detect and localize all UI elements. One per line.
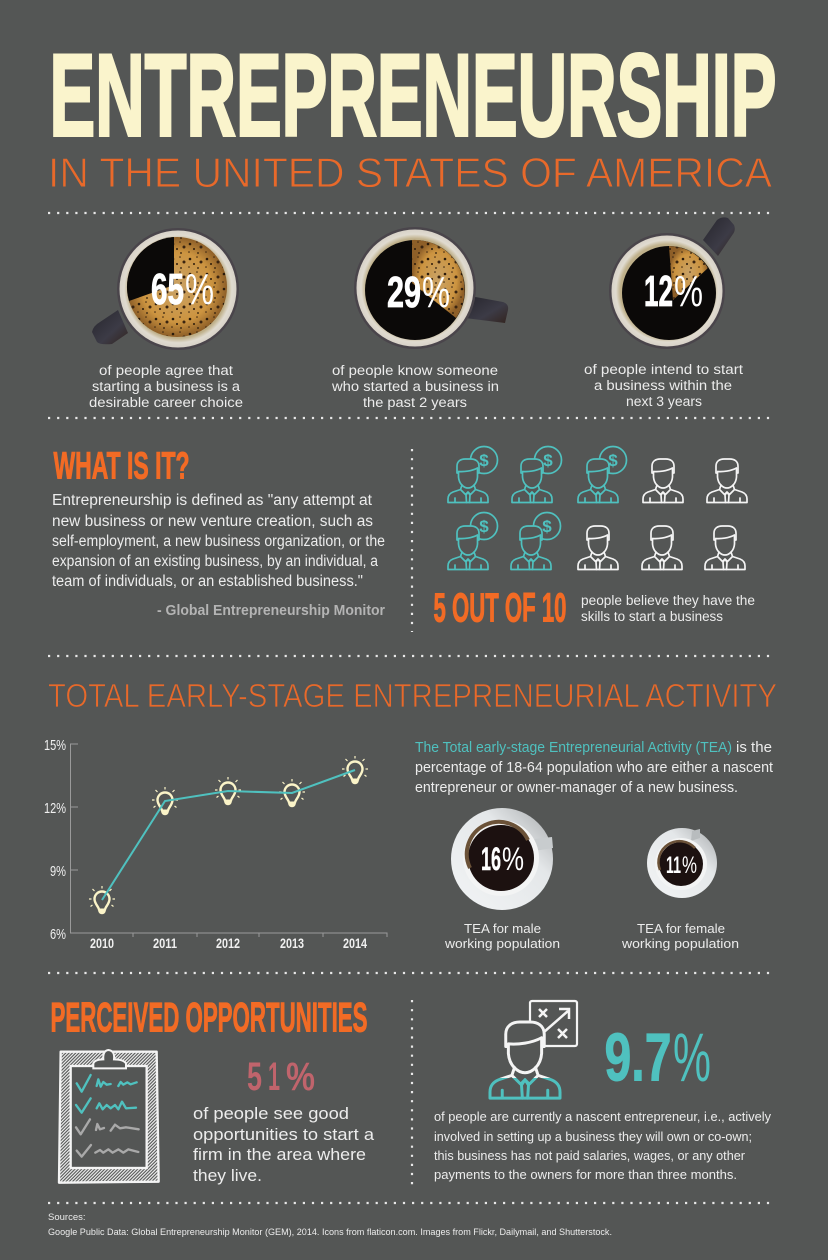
caption: 29% [331, 363, 499, 410]
icon: person with dollar 1 [448, 446, 498, 502]
icon: person with dollar 2 [512, 446, 562, 502]
pictogram: 5 out of 10 people [448, 446, 747, 570]
TEA description: The Total early-stage Entrepreneurial Activity (TEA) [415, 740, 732, 756]
stat: 9.7%: 9.7 [604, 1020, 672, 1096]
icon: person with dollar 7 [511, 512, 560, 570]
text: nascent entrepreneur: involved in setting up a business they will own or co-own; [434, 1129, 752, 1144]
line chart: TEA 2010-2014: 2011 [153, 935, 177, 951]
caption: 65% [89, 363, 243, 410]
caption: 29%: who started a business in [331, 379, 499, 394]
stat: 51%: % [286, 1055, 315, 1099]
caption: 29%: the past 2 years [363, 395, 467, 410]
white coffee cup: 16% male: 16 [481, 841, 501, 877]
definition text [52, 492, 385, 590]
caption: female: working population [621, 936, 739, 951]
coffee cup stat: 29% [354, 227, 508, 349]
stat caption [581, 593, 755, 624]
text: perceived opportunities: they live. [193, 1166, 262, 1185]
icon: person with dollar 7: $ [542, 517, 552, 536]
stat: 51% [247, 1055, 315, 1099]
text: nascent entrepreneur: payments to the owners for more than three months. [434, 1167, 737, 1182]
white coffee cup: 11% female: 11 [666, 852, 681, 879]
icon: person 10 [705, 526, 745, 570]
icon: person with dollar 3: $ [608, 451, 618, 470]
data line [102, 770, 355, 900]
stat: 51%: 1 [268, 1055, 280, 1099]
coffee cup stat: 12%: % [674, 267, 703, 316]
caption: male: TEA for male [464, 921, 541, 936]
caption: male [444, 921, 560, 951]
sources: Sources: [48, 1212, 86, 1223]
stat: 9.7%: % [673, 1019, 711, 1096]
stat caption: skills to start a business [581, 609, 723, 624]
text: perceived opportunities: of people see good [193, 1104, 349, 1123]
line chart: TEA 2010-2014 [44, 737, 387, 951]
icon: lightbulb markers [89, 756, 368, 914]
icon: person 4 [643, 459, 683, 502]
caption: 12%: a business within the [594, 378, 732, 393]
text: nascent entrepreneur [434, 1109, 771, 1182]
TEA description [415, 740, 773, 796]
line chart: TEA 2010-2014: 2012 [216, 935, 240, 951]
TEA description: percentage of 18-64 population who are either a nascent [415, 760, 773, 776]
icon: person with dollar 2: $ [543, 451, 553, 470]
line chart: TEA 2010-2014: 6% [50, 926, 66, 943]
white coffee cup: 11% female [647, 828, 717, 898]
icon: person 5 [707, 459, 747, 502]
caption: female: TEA for female [637, 921, 725, 936]
coffee cup stat: 65%: 65 [151, 265, 184, 314]
white coffee cup: 11% female: % [682, 852, 697, 879]
icon: person with dollar 6: $ [479, 517, 489, 536]
sources: Google Public Data: Global Entrepreneurship Monitor (GEM), 2014. Icons from flaticon.com. Images from Flickr, Dailymail, and Shutterstock. [48, 1227, 612, 1238]
icon: person with dollar 3 [578, 446, 626, 502]
definition text: Entrepreneurship is defined as "any attempt at [52, 492, 373, 509]
coffee cup stat: 12%: 12 [644, 267, 673, 316]
icon: person with dollar 1: $ [479, 451, 489, 470]
caption: 65%: desirable career choice [89, 395, 243, 410]
caption: 12%: of people intend to start [584, 362, 743, 377]
icon: person 8 [578, 526, 618, 570]
sources [48, 1212, 612, 1238]
heading: what is it: WHAT IS IT? [54, 446, 190, 488]
coffee cup stat: 65%: % [185, 265, 214, 314]
definition text: new business or new venture creation, such as [52, 513, 373, 530]
line chart: TEA 2010-2014: 2013 [280, 935, 304, 951]
line chart: TEA 2010-2014: 2014 [343, 935, 367, 951]
icon: person with dollar 6 [448, 512, 498, 570]
caption: female [621, 921, 739, 951]
definition text: self-employment, a new business organization, or the [52, 533, 385, 550]
coffee cup stat: 12% [609, 217, 735, 349]
line chart: TEA 2010-2014: 9% [50, 863, 66, 880]
coffee cup stat: 29%: 29 [387, 268, 421, 317]
text: perceived opportunities [193, 1104, 375, 1185]
coffee cup stat: 65% [92, 228, 239, 350]
TEA description: is the [736, 740, 772, 756]
text: perceived opportunities: opportunities to start a [193, 1125, 375, 1144]
caption: 12% [584, 362, 743, 409]
subtitle: IN THE UNITED STATES OF AMERICA [48, 149, 772, 196]
stat: 5 out of 10: 5 OUT OF 10 [434, 584, 566, 630]
line chart: TEA 2010-2014: 2010 [90, 935, 114, 951]
line chart: TEA 2010-2014: 15% [44, 737, 66, 754]
white coffee cup: 16% male [451, 808, 553, 910]
icon: person with strategy board [490, 1001, 577, 1098]
caption: 65%: of people agree that [99, 363, 233, 378]
heading: perceived opportunities: PERCEIVED OPPORTUNITIES [50, 994, 368, 1040]
caption: 29%: of people know someone [332, 363, 498, 378]
text: nascent entrepreneur: of people are currently a nascent entrepreneur, i.e., actively [434, 1109, 771, 1124]
coffee cup stat: 29%: % [422, 268, 450, 317]
icon: person 9 [642, 526, 682, 570]
attribution: - Global Entrepreneurship Monitor [157, 603, 385, 619]
definition text: expansion of an existing business, by an individual, a [52, 553, 378, 570]
stat: 51%: 5 [247, 1055, 262, 1099]
stat caption: people believe they have the [581, 593, 755, 608]
caption: 65%: starting a business is a [92, 379, 241, 394]
text: nascent entrepreneur: this business has not paid salaries, wages, or any other [434, 1148, 746, 1163]
caption: male: working population [444, 936, 560, 951]
line chart: TEA 2010-2014: 12% [44, 800, 66, 817]
icon: clipboard checklist [59, 1050, 159, 1183]
caption: 12%: next 3 years [626, 394, 702, 409]
text: perceived opportunities: firm in the area where [193, 1145, 366, 1164]
white coffee cup: 16% male: % [502, 841, 524, 877]
TEA description: entrepreneur or owner-manager of a new business. [415, 780, 738, 796]
definition text: team of individuals, or an established business." [52, 573, 363, 590]
